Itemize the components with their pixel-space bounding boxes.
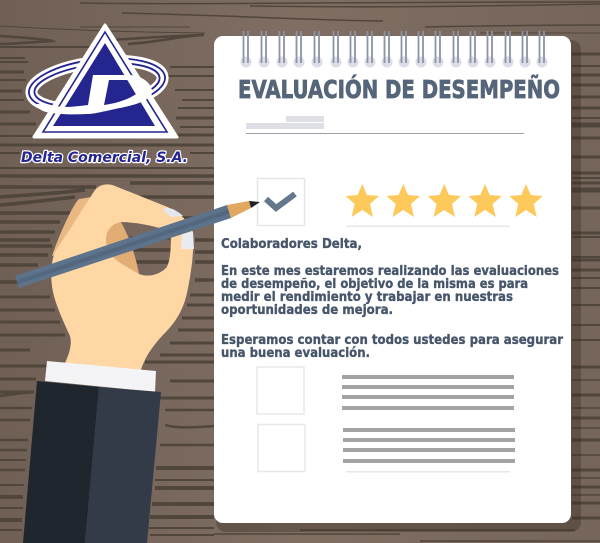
empty checkbox row 1 <box>257 367 514 414</box>
header placeholder lines <box>246 116 524 134</box>
notepad page <box>214 31 571 523</box>
checkbox with check mark <box>258 178 304 226</box>
finger nails <box>163 208 183 217</box>
logo triangle <box>34 25 177 137</box>
message text: oportunidades de mejora. <box>221 303 393 318</box>
logo wordmark: Delta Comercial, S.A. <box>21 150 188 166</box>
jacket sleeve <box>23 381 161 543</box>
hand <box>51 184 193 373</box>
message text <box>221 237 564 361</box>
rating underline <box>346 226 510 227</box>
five star rating <box>346 184 543 217</box>
message text: En este mes estaremos realizando las evaluaciones <box>221 264 559 279</box>
hand holding pencil <box>15 184 260 373</box>
logo letter D with swoosh <box>37 75 152 114</box>
notepad shadow <box>216 40 581 532</box>
empty checkbox row 2 <box>258 424 515 472</box>
message text: medir el rendimiento y trabajar en nuestras <box>221 290 513 305</box>
logo: Delta Comercial <box>21 25 188 166</box>
shirt cuff <box>45 361 156 392</box>
spiral binding <box>240 31 548 68</box>
message text: Colaboradores Delta, <box>221 237 362 252</box>
message text: Esperamos contar con todos ustedes para asegurar <box>221 333 564 348</box>
back finger shadow <box>52 197 92 256</box>
pencil <box>15 201 260 288</box>
message text: de desempeño, el objetivo de la misma es para <box>221 277 528 292</box>
gap between fingers <box>106 222 139 274</box>
logo orbit rings <box>26 51 168 119</box>
message text: una buena evaluación. <box>221 346 370 361</box>
